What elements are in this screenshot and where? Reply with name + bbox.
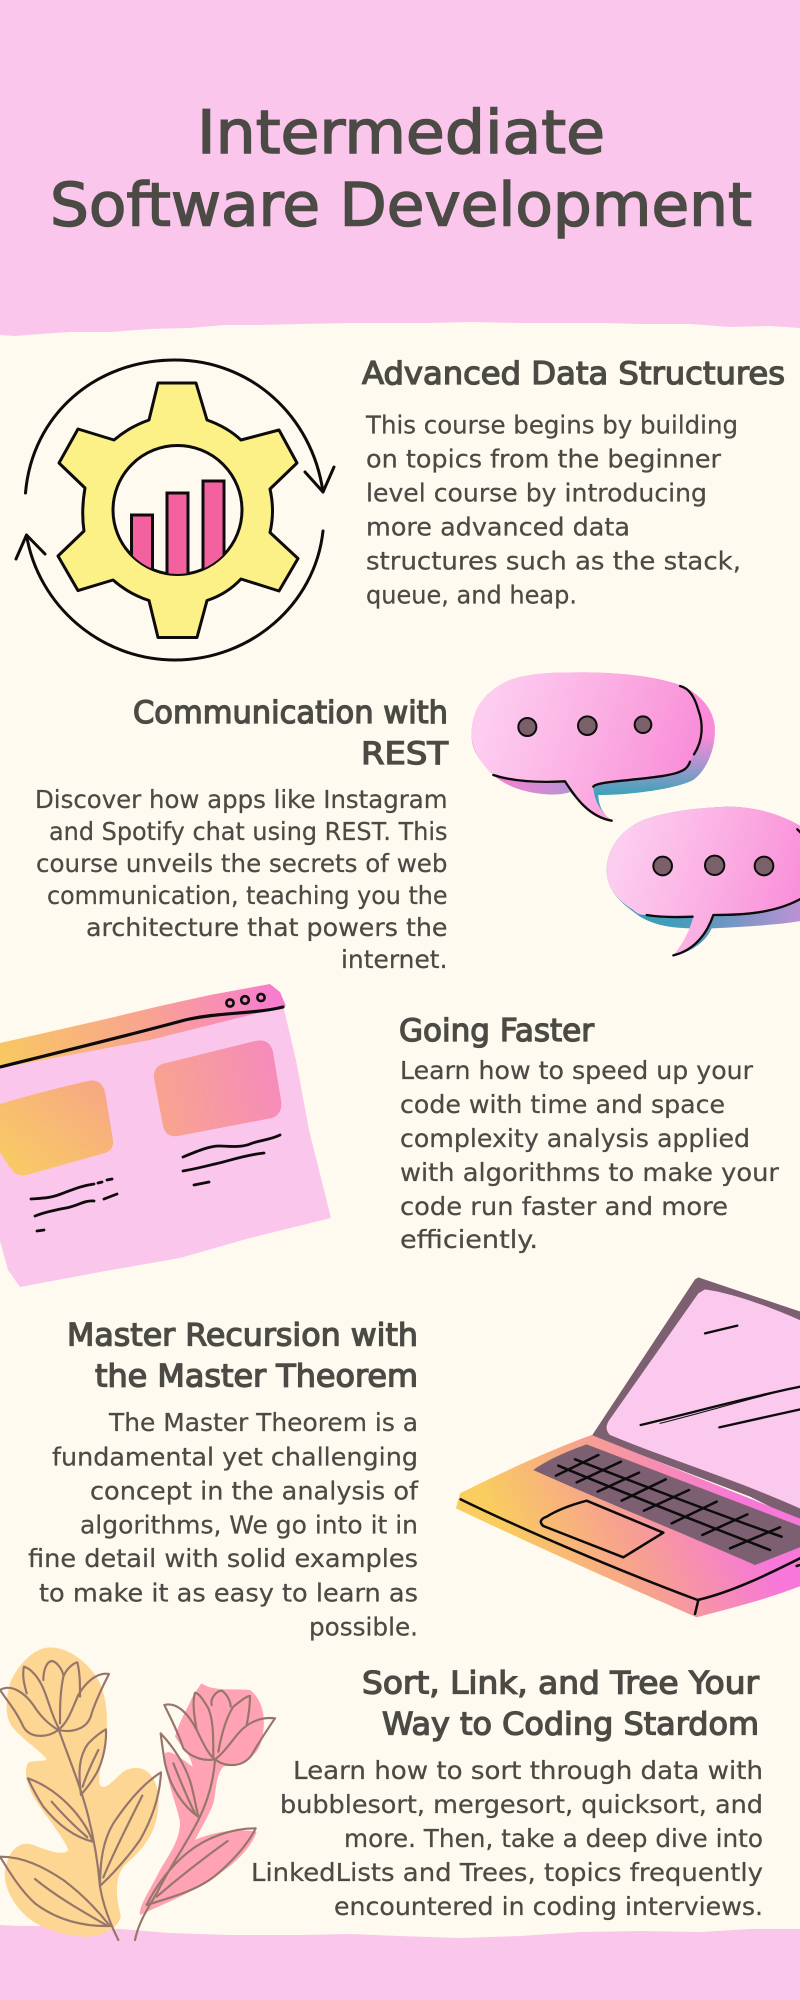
heading: Master Recursion: Master Recursion with: [67, 1318, 418, 1354]
gear hole: [113, 446, 242, 574]
icon: gear with bar chart and cycle arrows: [16, 360, 334, 660]
icon: flowers: [0, 1647, 275, 1940]
heading: Advanced Data Structures: Advanced Data Structures: [362, 356, 785, 392]
icon: laptop: [456, 1277, 800, 1617]
header divider: [0, 1007, 283, 1067]
trackpad: [541, 1501, 663, 1557]
keyboard: [533, 1444, 800, 1565]
bar chart: [132, 481, 224, 585]
text: Master Recursion body: [28, 1408, 419, 1642]
heading: Sort, Link, and Tree: Sort, Link, and Tree Your: [362, 1666, 759, 1702]
icon: browser window: [0, 984, 331, 1287]
text: Communication with REST body: [35, 785, 448, 974]
text: Communication with REST body: Discover how apps like Instagram: [35, 785, 448, 814]
text: Communication with REST body: communication, teaching you the: [47, 881, 448, 910]
heading: Communication with REST: Communication with: [133, 695, 448, 731]
text squiggles: [31, 1135, 280, 1231]
lower cycle arrow: [16, 531, 323, 660]
orange card: [0, 1080, 113, 1175]
text: Advanced Data Structures body: level course by introducing: [366, 478, 707, 508]
pink card: [154, 1040, 281, 1136]
window body: [0, 1005, 331, 1287]
yellow blob: [5, 1647, 158, 1937]
text: Master Recursion body: fundamental yet challenging: [52, 1442, 418, 1472]
text: Going Faster body: efficiently.: [400, 1225, 538, 1254]
text: Going Faster body: [400, 1056, 780, 1254]
text: Sort, Link, and Tree body: bubblesort, mergesort, quicksort, and: [280, 1790, 763, 1819]
text: Sort, Link, and Tree body: LinkedLists and Trees, topics frequently: [251, 1858, 763, 1887]
text: Master Recursion body: fine detail with solid examples: [28, 1544, 418, 1573]
title: [50, 98, 752, 240]
text: Advanced Data Structures body: [365, 410, 741, 610]
right flower outline: [135, 1691, 275, 1940]
heading: Master Recursion: the Master Theorem: [95, 1358, 418, 1394]
top pink banner: [0, 0, 800, 336]
icon: speech bubbles: [471, 672, 800, 956]
laptop screen: [592, 1277, 800, 1523]
upper speech bubble: [471, 672, 715, 821]
text: Communication with REST body: internet.: [341, 945, 448, 974]
text: Going Faster body: Learn how to speed up your: [400, 1056, 754, 1085]
text: Advanced Data Structures body: This course begins by building: [365, 410, 738, 440]
text: Sort, Link, and Tree body: [251, 1756, 763, 1921]
text: Going Faster body: with algorithms to make your: [400, 1158, 780, 1187]
text: Going Faster body: code run faster and more: [400, 1192, 728, 1221]
text: Advanced Data Structures body: on topics from the beginner: [366, 444, 722, 474]
text: Advanced Data Structures body: structures such as the stack,: [366, 546, 741, 576]
title: Intermediate: [197, 98, 605, 168]
window header bar: [0, 984, 286, 1068]
text: Communication with REST body: course unveils the secrets of web: [36, 849, 448, 878]
heading: Communication with REST: REST: [361, 736, 449, 772]
text: Master Recursion body: The Master Theorem is a: [108, 1408, 418, 1437]
text: Sort, Link, and Tree body: encountered in coding interviews.: [334, 1892, 763, 1921]
text: Advanced Data Structures body: more advanced data: [366, 512, 630, 542]
text: Sort, Link, and Tree body: more. Then, take a deep dive into: [344, 1824, 763, 1853]
base edge lines: [461, 1499, 800, 1614]
upper cycle arrow: [26, 360, 334, 493]
laptop base: [456, 1435, 800, 1617]
title: Software Development: [50, 170, 752, 240]
text: Master Recursion body: concept in the analysis of: [90, 1476, 419, 1506]
bottom pink band: [0, 1925, 800, 2000]
heading: Going Faster: Going Faster: [399, 1013, 594, 1049]
window control dots: [226, 994, 265, 1007]
text: Advanced Data Structures body: queue, and heap.: [366, 580, 577, 610]
lower speech bubble: [607, 807, 800, 956]
text: Master Recursion body: to make it as easy to learn as: [39, 1578, 418, 1608]
text: Going Faster body: complexity analysis applied: [400, 1124, 750, 1153]
heading: Sort, Link, and Tree: [362, 1666, 759, 1742]
text: Going Faster body: code with time and space: [400, 1090, 725, 1119]
text: Master Recursion body: possible.: [309, 1612, 418, 1642]
heading: Master Recursion: [67, 1318, 418, 1394]
left flower outline: [0, 1661, 161, 1940]
heading: Communication with REST: [133, 695, 449, 772]
text: Sort, Link, and Tree body: Learn how to sort through data with: [293, 1756, 763, 1785]
text: Communication with REST body: architecture that powers the: [86, 913, 447, 942]
text: Master Recursion body: algorithms, We go into it in: [80, 1510, 418, 1540]
gear: [58, 383, 298, 638]
heading: Sort, Link, and Tree: Way to Coding Stardom: [382, 1706, 759, 1742]
text: Communication with REST body: and Spotify chat using REST. This: [49, 817, 448, 846]
pink blob: [140, 1683, 264, 1915]
